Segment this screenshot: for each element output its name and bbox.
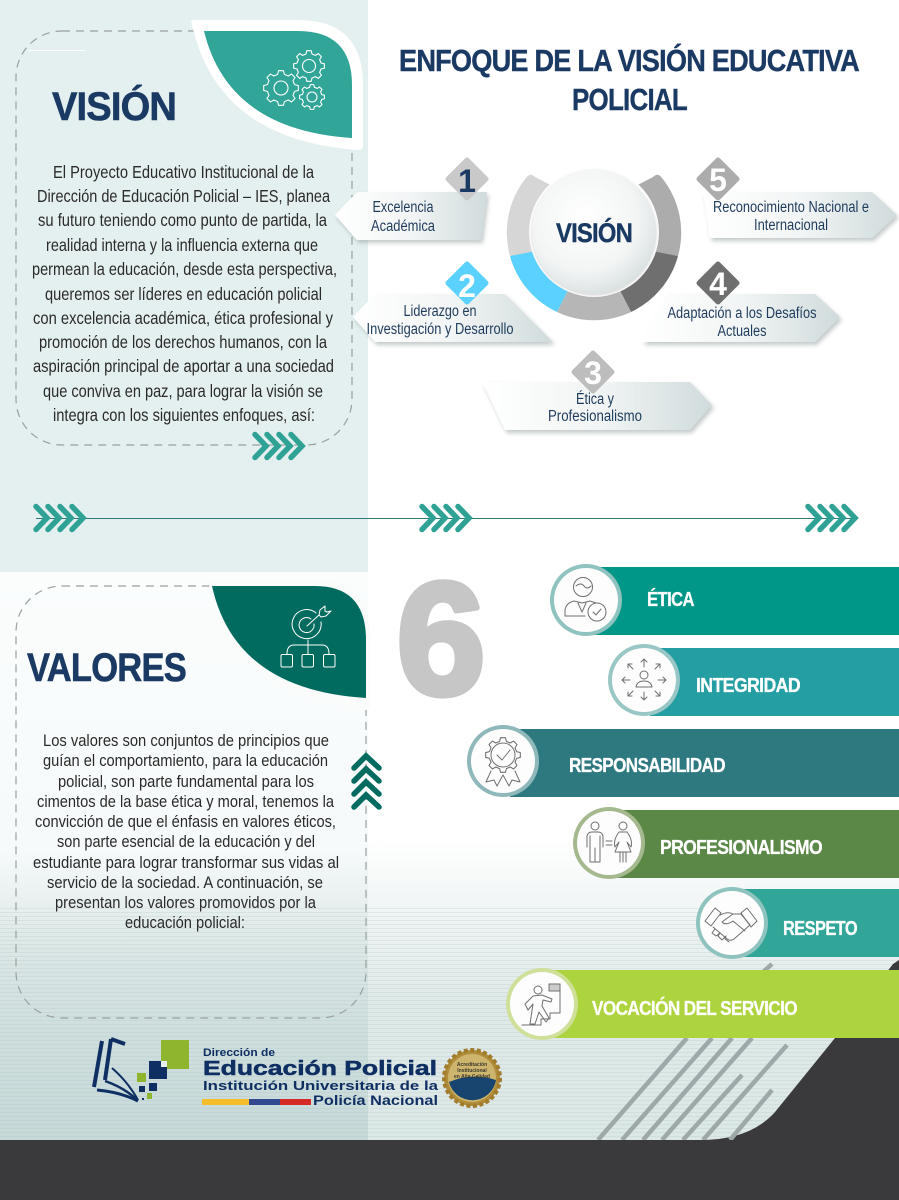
text block: valores: convicción de que el énfasis en valores éticos, — [35, 812, 336, 831]
item 1: Excelencia Académica — [335, 160, 487, 240]
flag bar — [202, 1099, 311, 1105]
logo: Dirección de Educación Policial — [94, 1039, 500, 1108]
label 3: Ética y — [576, 391, 614, 408]
label 3 — [548, 391, 642, 425]
text block: valores: Los valores son conjuntos de principios que — [43, 731, 329, 750]
arrow: up chevrons — [354, 756, 379, 807]
center label: VISIÓN — [556, 217, 632, 248]
text block: vision: Dirección de Educación Policial – IES, planea — [37, 186, 330, 206]
text block: vision: El Proyecto Educativo Institucional de la — [53, 162, 314, 182]
label 2: Liderazgo en — [404, 303, 476, 320]
text block: valores: presentan los valores promovidos por la — [55, 893, 316, 912]
text block: valores: educación policial: — [125, 913, 245, 932]
text block: vision: queremos ser líderes en educación policial — [45, 284, 322, 304]
label 5: Internacional — [754, 217, 828, 234]
text block: valores: estudiante para lograr transformar sus vidas al — [33, 853, 339, 872]
leaf: valores — [208, 580, 370, 710]
text block: valores: servicio de la sociedad. A continuación, se — [47, 873, 323, 892]
panel: valores — [16, 580, 379, 1018]
number 3 — [574, 353, 612, 391]
logo text — [203, 1047, 439, 1108]
number 5: 5 — [709, 162, 727, 198]
label: RESPETO: RESPETO — [783, 918, 857, 940]
value bar: integridad — [608, 644, 899, 716]
dashed frame: vision — [16, 31, 352, 445]
text block: vision: que conviva en paz, para lograr la visión se — [43, 381, 323, 401]
label 4: Adaptación a los Desafíos — [668, 305, 817, 322]
text block: vision: realidad interna y la influencia externa que — [46, 235, 318, 255]
label: ÉTICA: ÉTICA — [647, 588, 694, 611]
label 5 — [713, 199, 869, 234]
number 1 — [448, 160, 486, 199]
timeline arrows — [36, 506, 858, 530]
text block: vision: integra con los siguientes enfoques, así: — [53, 405, 315, 425]
ring segments — [507, 175, 681, 320]
label 2: Investigación y Desarrollo — [366, 321, 514, 338]
text block: valores: policial, son parte fundamental para los — [58, 772, 314, 791]
arrow: vision chevrons — [255, 434, 302, 458]
label: PROFESIONALISMO: PROFESIONALISMO — [660, 837, 822, 859]
label 1 — [371, 199, 435, 235]
heading: VALORES: VALORES — [27, 646, 186, 690]
title: POLICIAL — [572, 82, 687, 117]
panel: vision — [16, 20, 363, 458]
label 3: Profesionalismo — [548, 408, 642, 425]
center circle halo — [529, 167, 659, 297]
value bar: profesionalismo — [573, 807, 899, 879]
text block: valores: guían el comportamiento, para la educación — [43, 751, 328, 770]
diagonal lines — [598, 964, 787, 1140]
logo text: Educación Policial — [203, 1058, 437, 1080]
text block: valores — [33, 731, 339, 932]
number 4: 4 — [709, 266, 727, 302]
text block: vision: permean la educación, desde esta perspectiva, — [32, 259, 337, 279]
icon: award rosette — [467, 725, 539, 797]
seal: accreditation: Acreditación — [457, 1062, 487, 1068]
label: INTEGRIDAD: INTEGRIDAD — [696, 675, 800, 697]
footer bar — [0, 1140, 899, 1200]
diagram: vision ring — [507, 167, 681, 320]
number 3: 3 — [584, 355, 602, 391]
value bar: vocación del servicio — [506, 968, 899, 1040]
item 2: Liderazgo — [353, 264, 553, 342]
logo text: Dirección de — [203, 1047, 275, 1059]
text block: vision: aspiración principal de aportar a una sociedad — [33, 356, 334, 376]
label 5: Reconocimiento Nacional e — [713, 199, 869, 216]
text block: vision: su futuro teniendo como punto de partida, la — [38, 210, 327, 230]
small white rule — [28, 50, 85, 51]
label 2 — [366, 303, 514, 338]
text block: vision: promoción de los derechos humanos, con la — [39, 332, 327, 352]
logo text: Policía Nacional — [313, 1093, 438, 1108]
item 3: Ética y Profesionalismo — [482, 353, 712, 430]
icon: target hierarchy — [281, 606, 335, 667]
item 5: Reconocimiento — [699, 160, 897, 238]
heading: VISIÓN: VISIÓN — [52, 83, 176, 129]
value bar: ética — [550, 564, 899, 636]
text block: vision: con excelencia académica, ética profesional y — [33, 308, 333, 328]
number 2: 2 — [458, 268, 476, 304]
label 4: Actuales — [718, 323, 767, 340]
icon: person arrows — [608, 644, 680, 716]
dark corner shape — [700, 960, 899, 1140]
icon: man equals woman — [573, 807, 645, 879]
seal: accreditation: en Alta Calidad — [454, 1074, 490, 1080]
text block: valores: cimentos de la base ética y moral, tenemos la — [37, 792, 334, 811]
value bar: responsabilidad — [467, 725, 899, 797]
icon: person check — [550, 564, 622, 636]
text block: vision — [32, 162, 337, 425]
number 1: 1 — [458, 163, 476, 199]
number 2 — [448, 264, 486, 304]
icon: person climbing stairs — [506, 968, 578, 1040]
leaf: vision — [191, 20, 363, 150]
text block: valores: son parte esencial de la educación y del — [57, 832, 315, 851]
label: RESPONSABILIDAD: RESPONSABILIDAD — [569, 755, 725, 777]
number 5 — [699, 160, 737, 198]
label: VOCACIÓN DEL SERVICIO: VOCACIÓN DEL SERVICIO — [592, 996, 797, 1020]
dashed frame: valores — [16, 586, 366, 1018]
number 4 — [699, 264, 737, 302]
logo text: Institución Universitaria de la — [203, 1079, 439, 1093]
title — [399, 42, 859, 117]
big number 6: 6 — [397, 549, 485, 728]
seal: accreditation — [444, 1050, 500, 1106]
label 4 — [668, 305, 817, 340]
value bar: respeto — [696, 887, 899, 959]
label 1: Académica — [371, 218, 435, 235]
item 4: Adaptación — [642, 264, 840, 342]
icon: gears — [264, 51, 324, 109]
center circle — [532, 170, 656, 294]
icon: handshake — [696, 887, 768, 959]
seal: accreditation: Institucional — [457, 1068, 487, 1074]
label 1: Excelencia — [372, 199, 434, 216]
logo mark — [94, 1039, 189, 1101]
